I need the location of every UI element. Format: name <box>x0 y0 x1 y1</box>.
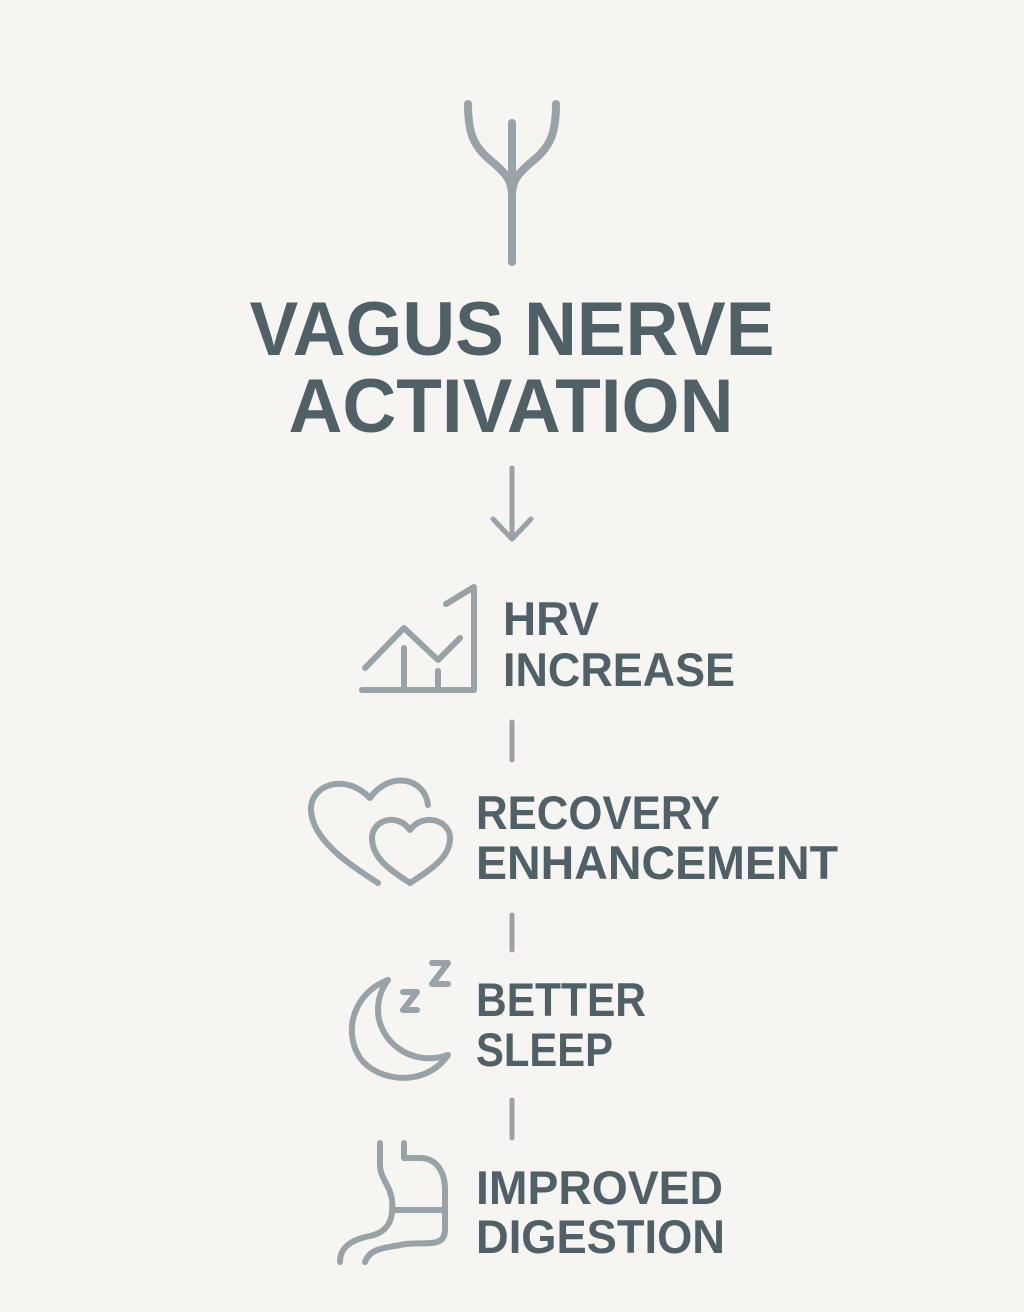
title <box>250 287 774 449</box>
text: improved digestion <box>476 1161 725 1263</box>
text: HRV increase: INCREASE <box>503 643 735 696</box>
text: improved digestion: DIGESTION <box>476 1210 725 1263</box>
text: improved digestion: IMPROVED <box>476 1161 723 1214</box>
text: better sleep: SLEEP <box>476 1023 613 1076</box>
connector dash <box>510 722 514 760</box>
text: recovery enhancement: RECOVERY <box>476 786 720 839</box>
icon: moon and Zs <box>352 963 448 1078</box>
text: better sleep <box>476 973 646 1076</box>
arrow: down <box>493 468 531 539</box>
text: HRV increase <box>503 592 735 696</box>
icon: stomach <box>340 1143 445 1262</box>
title: ACTIVATION <box>288 364 734 449</box>
text: recovery enhancement: ENHANCEMENT <box>476 836 838 889</box>
text: HRV increase: HRV <box>503 592 600 645</box>
text: better sleep: BETTER <box>476 973 646 1026</box>
icon: vagus nerve <box>468 104 556 262</box>
connector dash <box>510 915 514 950</box>
connector dash <box>510 1100 514 1138</box>
icon: HRV chart <box>362 587 474 690</box>
text: recovery enhancement <box>476 786 838 889</box>
title: VAGUS NERVE <box>250 287 774 372</box>
icon: hearts <box>311 780 450 883</box>
